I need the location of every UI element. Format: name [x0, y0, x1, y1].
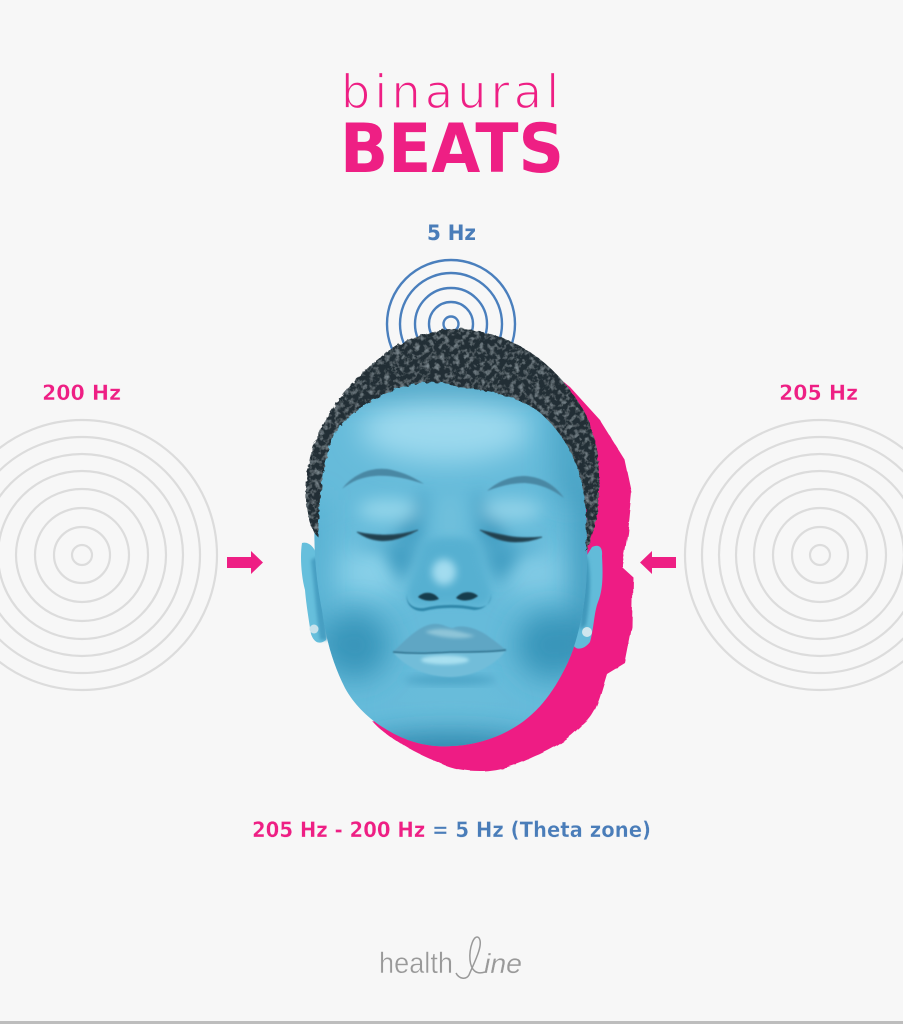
right eyebrow — [487, 476, 564, 498]
arrow: pointing right — [227, 551, 263, 574]
head illustration — [300, 329, 603, 770]
hair — [306, 329, 599, 552]
left earring — [310, 624, 318, 634]
left grey concentric rings: 200 Hz — [0, 420, 217, 690]
logo: healthline: ine — [484, 948, 522, 979]
title line: binaural: binaural — [341, 65, 559, 119]
logo swash — [456, 937, 485, 978]
forehead and cheek highlights — [332, 388, 569, 604]
label: 200 Hz: 200 Hz — [42, 381, 121, 405]
left ear — [301, 543, 328, 643]
arrow: pointing left — [640, 551, 676, 574]
right earring — [582, 627, 592, 637]
blue concentric rings: 5 Hz — [387, 260, 515, 388]
equation: 205 Hz - 200 Hz = 5 Hz (Theta zone) — [252, 818, 651, 842]
title line: BEATS: BEATS — [340, 110, 564, 189]
right ear — [574, 546, 603, 649]
left eyebrow — [342, 469, 424, 489]
bottom rule — [0, 1021, 903, 1024]
nose bridge and eye sockets — [358, 490, 544, 585]
pink head shadow — [373, 367, 633, 771]
lips — [393, 624, 506, 685]
logo: healthline: health — [379, 947, 453, 980]
label: 205 Hz: 205 Hz — [779, 381, 858, 405]
nostrils — [418, 593, 439, 601]
logo: healthline — [379, 937, 522, 980]
nose — [407, 538, 491, 611]
right grey concentric rings: 205 Hz — [685, 420, 903, 690]
left closed eye — [357, 530, 418, 541]
lower face shading — [314, 382, 588, 746]
label: 5 Hz: 5 Hz — [427, 221, 476, 245]
face — [314, 381, 588, 746]
right closed eye — [480, 530, 542, 542]
title — [340, 65, 564, 189]
